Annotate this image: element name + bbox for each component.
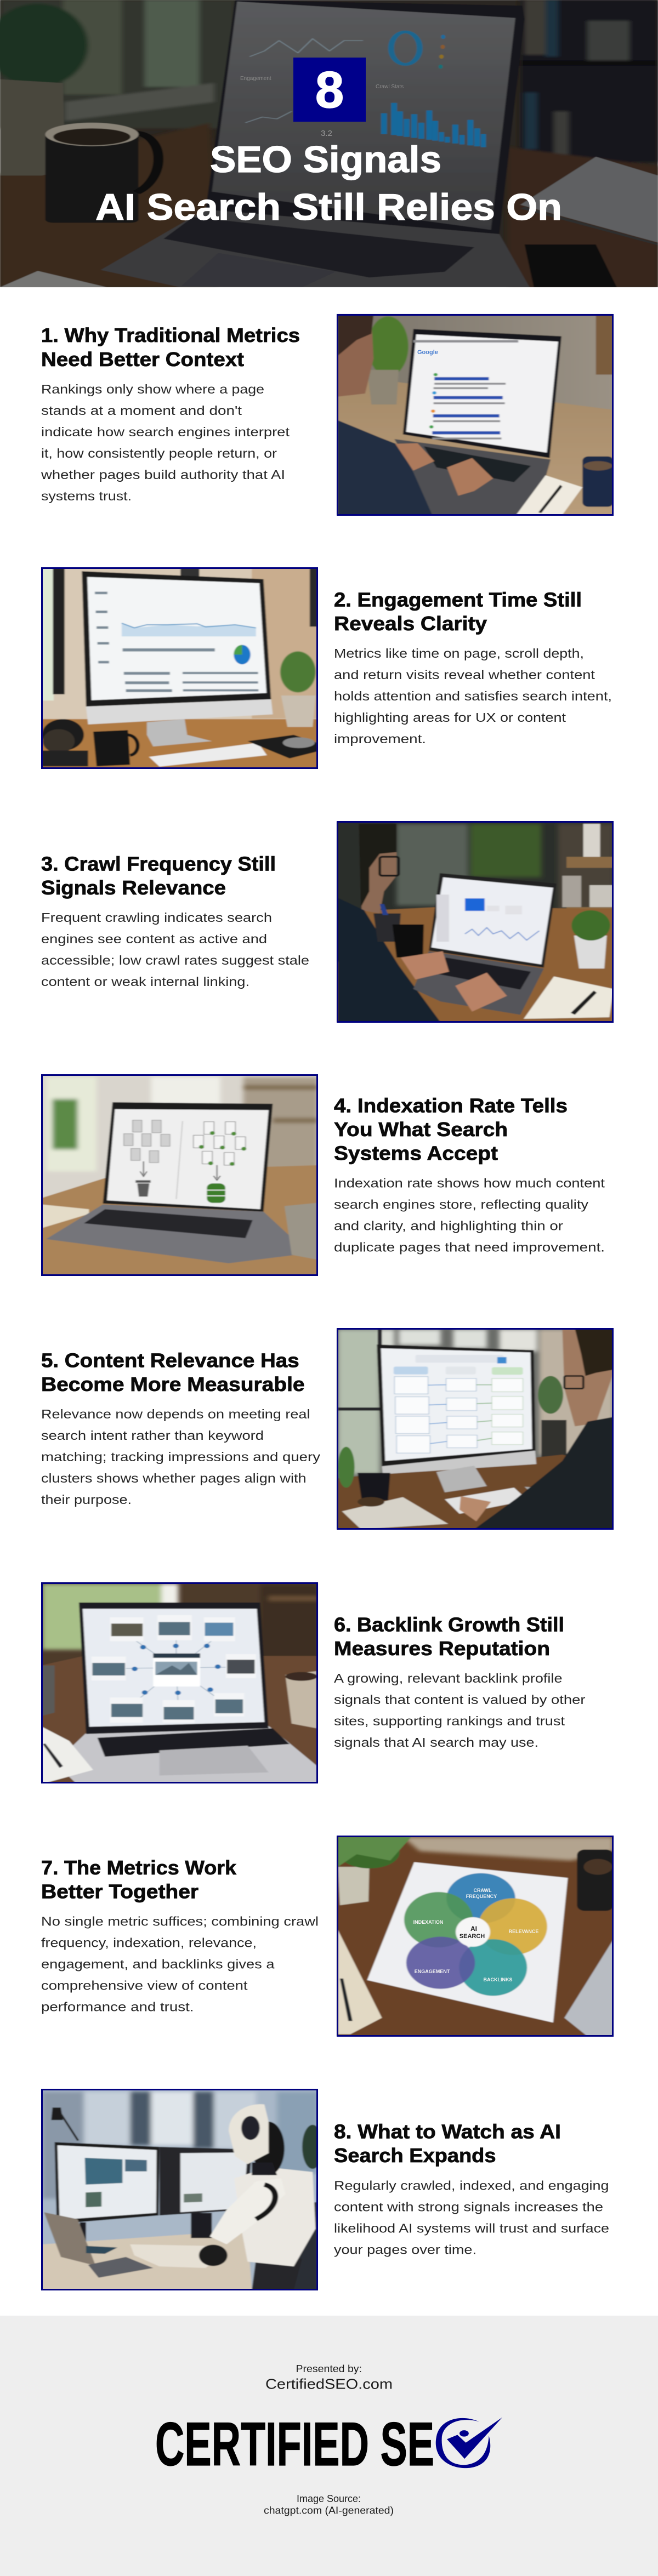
body text 1: stands at a moment and don't bbox=[41, 403, 242, 418]
panel: 2 engagement time bbox=[41, 567, 612, 768]
heading 2: 2. Engagement Time Still bbox=[334, 589, 582, 611]
body text 1: it, how consistently people return, or bbox=[41, 446, 277, 460]
Google logo text: Google bbox=[417, 349, 438, 356]
body text 1 bbox=[41, 382, 290, 503]
body text 6: sites, supporting rankings and trust bbox=[334, 1714, 565, 1728]
body text 5: Relevance now depends on meeting real bbox=[41, 1407, 310, 1421]
body text 2: improvement. bbox=[334, 732, 426, 746]
photo 8: robot at monitors bbox=[41, 2089, 323, 2290]
body text 4: search engines store, reflecting quality bbox=[334, 1198, 588, 1212]
heading 7: Better Together bbox=[41, 1880, 198, 1903]
heading 1: Need Better Context bbox=[41, 348, 244, 371]
header background photo: laptop on desk bbox=[0, 0, 658, 287]
body text 7: performance and trust. bbox=[41, 1999, 194, 2014]
heading 4: 4. Indexation Rate Tells bbox=[334, 1094, 568, 1117]
photo 2: analytics dashboard on desktop bbox=[41, 567, 318, 768]
body text 3: accessible; low crawl rates suggest stale bbox=[41, 953, 309, 967]
presented by: Presented by: bbox=[296, 2363, 362, 2374]
body text 8: your pages over time. bbox=[334, 2243, 477, 2257]
body text 8 bbox=[334, 2179, 609, 2257]
body text 4: Indexation rate shows how much content bbox=[334, 1176, 605, 1190]
photo 1: person searching on laptop bbox=[337, 314, 614, 515]
venn diagram labels: INDEXATION bbox=[413, 1919, 443, 1925]
photo 4: indexed pages on laptop bbox=[41, 1075, 318, 1275]
venn diagram labels: RELEVANCE bbox=[509, 1929, 538, 1934]
panel: 8 what to watch bbox=[41, 2089, 609, 2290]
body text 1: Rankings only show where a page bbox=[41, 382, 264, 396]
number badge: 8 bbox=[315, 61, 344, 118]
heading 2 bbox=[334, 589, 582, 635]
photo 5: query clusters on monitor bbox=[337, 1328, 614, 1529]
body text 8: Regularly crawled, indexed, and engaging bbox=[334, 2179, 609, 2193]
title: AI Search Still Relies On bbox=[95, 186, 562, 228]
heading 5 bbox=[41, 1349, 305, 1395]
body text 1: indicate how search engines interpret bbox=[41, 425, 290, 439]
heading 3: 3. Crawl Frequency Still bbox=[41, 853, 276, 875]
body text 2: and return visits reveal whether content bbox=[334, 668, 595, 682]
heading 1 bbox=[41, 324, 300, 371]
body text 2: highlighting areas for UX or content bbox=[334, 710, 566, 725]
body text 7: comprehensive view of content bbox=[41, 1979, 248, 1993]
logo: Certified SEO: CERTIFIED SE bbox=[155, 2410, 434, 2478]
body text 6: signals that content is valued by other bbox=[334, 1692, 586, 1707]
heading 4: Systems Accept bbox=[334, 1142, 498, 1165]
heading 8 bbox=[334, 2120, 561, 2167]
heading 5: Become More Measurable bbox=[41, 1373, 305, 1395]
body text 5 bbox=[41, 1407, 320, 1507]
body text 3: Frequent crawling indicates search bbox=[41, 910, 272, 925]
title: SEO Signals bbox=[210, 139, 441, 180]
body text 5: their purpose. bbox=[41, 1492, 132, 1507]
body text 4 bbox=[334, 1176, 605, 1255]
icon: check mark in circle bbox=[436, 2418, 502, 2468]
body text 3: engines see content as active and bbox=[41, 932, 267, 946]
venn diagram labels: SEARCH bbox=[460, 1933, 485, 1940]
venn diagram labels: AI bbox=[470, 1925, 477, 1933]
panel: 3 crawl frequency bbox=[41, 821, 614, 1022]
presented by: CertifiedSEO.com bbox=[265, 2375, 393, 2392]
number badge bbox=[293, 58, 366, 122]
body text 7 bbox=[41, 1914, 319, 2014]
heading 5: 5. Content Relevance Has bbox=[41, 1349, 299, 1371]
heading 8: 8. What to Watch as AI bbox=[334, 2120, 561, 2143]
body text 5: matching; tracking impressions and query bbox=[41, 1450, 320, 1464]
header small dashboard labels: 3.2 bbox=[321, 129, 332, 138]
heading 3 bbox=[41, 853, 276, 899]
image source: Image Source: bbox=[297, 2493, 361, 2504]
header small dashboard labels bbox=[240, 76, 404, 138]
body text 7: No single metric suffices; combining crawl bbox=[41, 1914, 319, 1928]
body text 1: whether pages build authority that AI bbox=[41, 468, 285, 482]
body text 3: content or weak internal linking. bbox=[41, 974, 249, 989]
photo 3: man checking crawl stats bbox=[337, 821, 614, 1022]
panel: 5 content relevance bbox=[41, 1328, 614, 1529]
body text 4: duplicate pages that need improvement. bbox=[334, 1240, 605, 1255]
panel: 1 traditional metrics bbox=[41, 314, 614, 515]
header banner bbox=[0, 0, 658, 287]
heading 6 bbox=[334, 1614, 564, 1660]
body text 6 bbox=[334, 1671, 586, 1749]
heading 4 bbox=[334, 1094, 568, 1165]
body text 1: systems trust. bbox=[41, 489, 132, 503]
heading 7: 7. The Metrics Work bbox=[41, 1856, 237, 1879]
photo 6: backlink map on laptop bbox=[41, 1582, 318, 1783]
venn diagram labels bbox=[413, 1888, 538, 1982]
heading 6: Measures Reputation bbox=[334, 1637, 550, 1660]
heading 7 bbox=[41, 1856, 237, 1903]
body text 3 bbox=[41, 910, 309, 989]
body text 7: frequency, indexation, relevance, bbox=[41, 1936, 257, 1950]
body text 8: likelihood AI systems will trust and surface bbox=[334, 2221, 609, 2236]
heading 2: Reveals Clarity bbox=[334, 612, 487, 635]
body text 2: Metrics like time on page, scroll depth, bbox=[334, 646, 584, 660]
heading 3: Signals Relevance bbox=[41, 876, 226, 899]
venn diagram labels: FREQUENCY bbox=[466, 1894, 497, 1899]
footer bbox=[0, 2316, 658, 2576]
venn diagram labels: ENGAGEMENT bbox=[415, 1969, 450, 1974]
body text 6: A growing, relevant backlink profile bbox=[334, 1671, 563, 1685]
panel: 4 indexation rate bbox=[41, 1075, 605, 1275]
body text 5: search intent rather than keyword bbox=[41, 1428, 264, 1443]
panel: 6 backlink growth bbox=[41, 1582, 586, 1783]
panel: 7 metrics together bbox=[41, 1836, 614, 2036]
body text 4: and clarity, and highlighting thin or bbox=[334, 1219, 563, 1233]
body text 8: content with strong signals increases the bbox=[334, 2200, 603, 2214]
title bbox=[95, 139, 562, 228]
image source bbox=[264, 2493, 394, 2516]
presented by bbox=[265, 2363, 393, 2392]
venn diagram labels: CRAWL bbox=[474, 1888, 492, 1893]
header small dashboard labels: Crawl Stats bbox=[376, 84, 404, 90]
heading 8: Search Expands bbox=[334, 2144, 496, 2167]
body text 7: engagement, and backlinks gives a bbox=[41, 1957, 275, 1971]
photo 7: venn diagram on desk bbox=[337, 1836, 614, 2036]
image source: chatgpt.com (AI-generated) bbox=[264, 2505, 394, 2516]
body text 2 bbox=[334, 646, 612, 746]
heading 4: You What Search bbox=[334, 1118, 508, 1141]
body text 2: holds attention and satisfies search intent, bbox=[334, 689, 612, 703]
heading 1: 1. Why Traditional Metrics bbox=[41, 324, 300, 346]
heading 6: 6. Backlink Growth Still bbox=[334, 1614, 564, 1636]
header small dashboard labels: Engagement bbox=[240, 76, 271, 82]
venn diagram labels: BACKLINKS bbox=[484, 1977, 512, 1982]
body text 5: clusters shows whether pages align with bbox=[41, 1471, 307, 1485]
body text 6: signals that AI search may use. bbox=[334, 1735, 538, 1749]
